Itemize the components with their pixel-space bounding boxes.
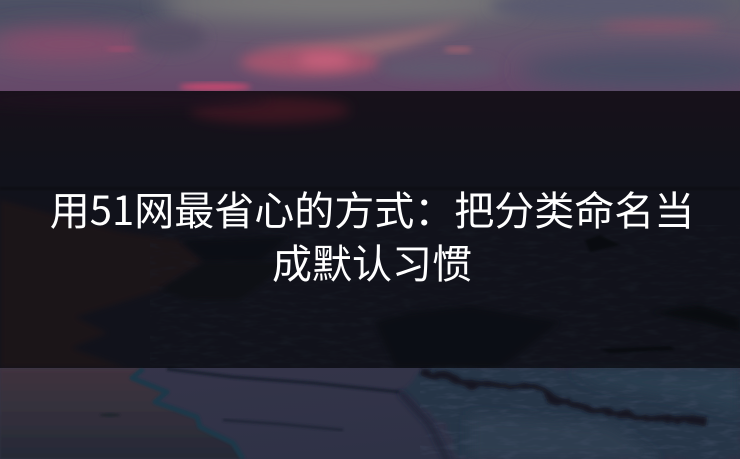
title: 用51网最省心的方式：把分类命名当成默认习惯 xyxy=(50,179,694,290)
dark wave lines xyxy=(167,369,400,392)
water texture xyxy=(150,225,740,368)
sand, bottom left xyxy=(0,368,243,459)
foam, bottom right xyxy=(405,368,740,459)
foreground beach xyxy=(140,368,488,414)
dry sand, in band xyxy=(0,200,205,368)
sky xyxy=(0,0,740,91)
foam edge line xyxy=(132,369,243,459)
wave shadows in band xyxy=(198,241,277,258)
dark overlay band xyxy=(0,91,740,368)
red reflection xyxy=(190,97,350,123)
